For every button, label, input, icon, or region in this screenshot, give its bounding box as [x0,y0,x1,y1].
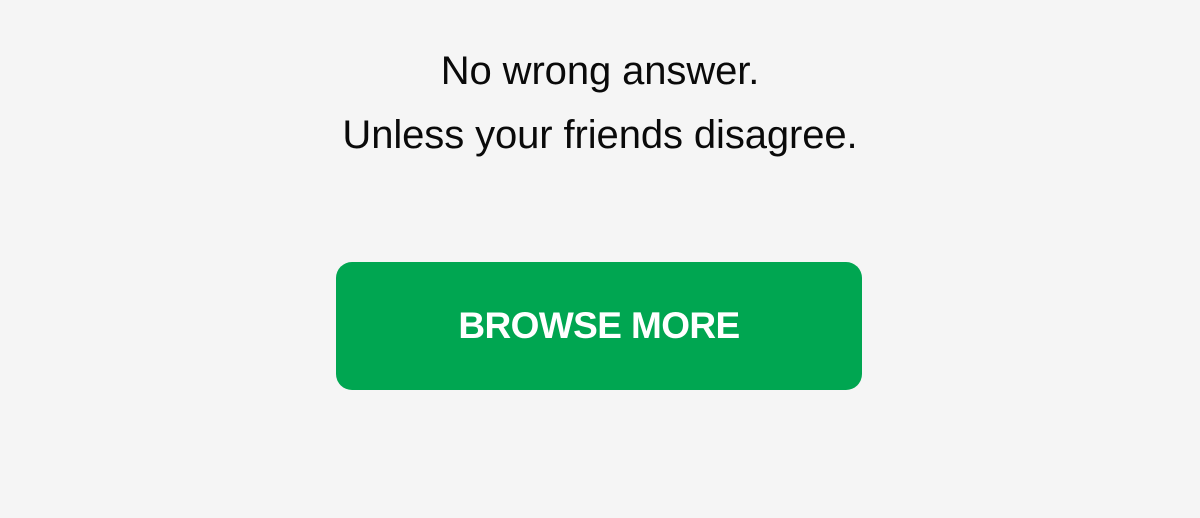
heading line 2: Unless your friends disagree. [342,113,858,157]
button: browse more [336,262,862,390]
heading text [342,49,858,157]
heading line 1: No wrong answer. [441,49,759,93]
button: browse more: BROWSE MORE [458,305,740,346]
